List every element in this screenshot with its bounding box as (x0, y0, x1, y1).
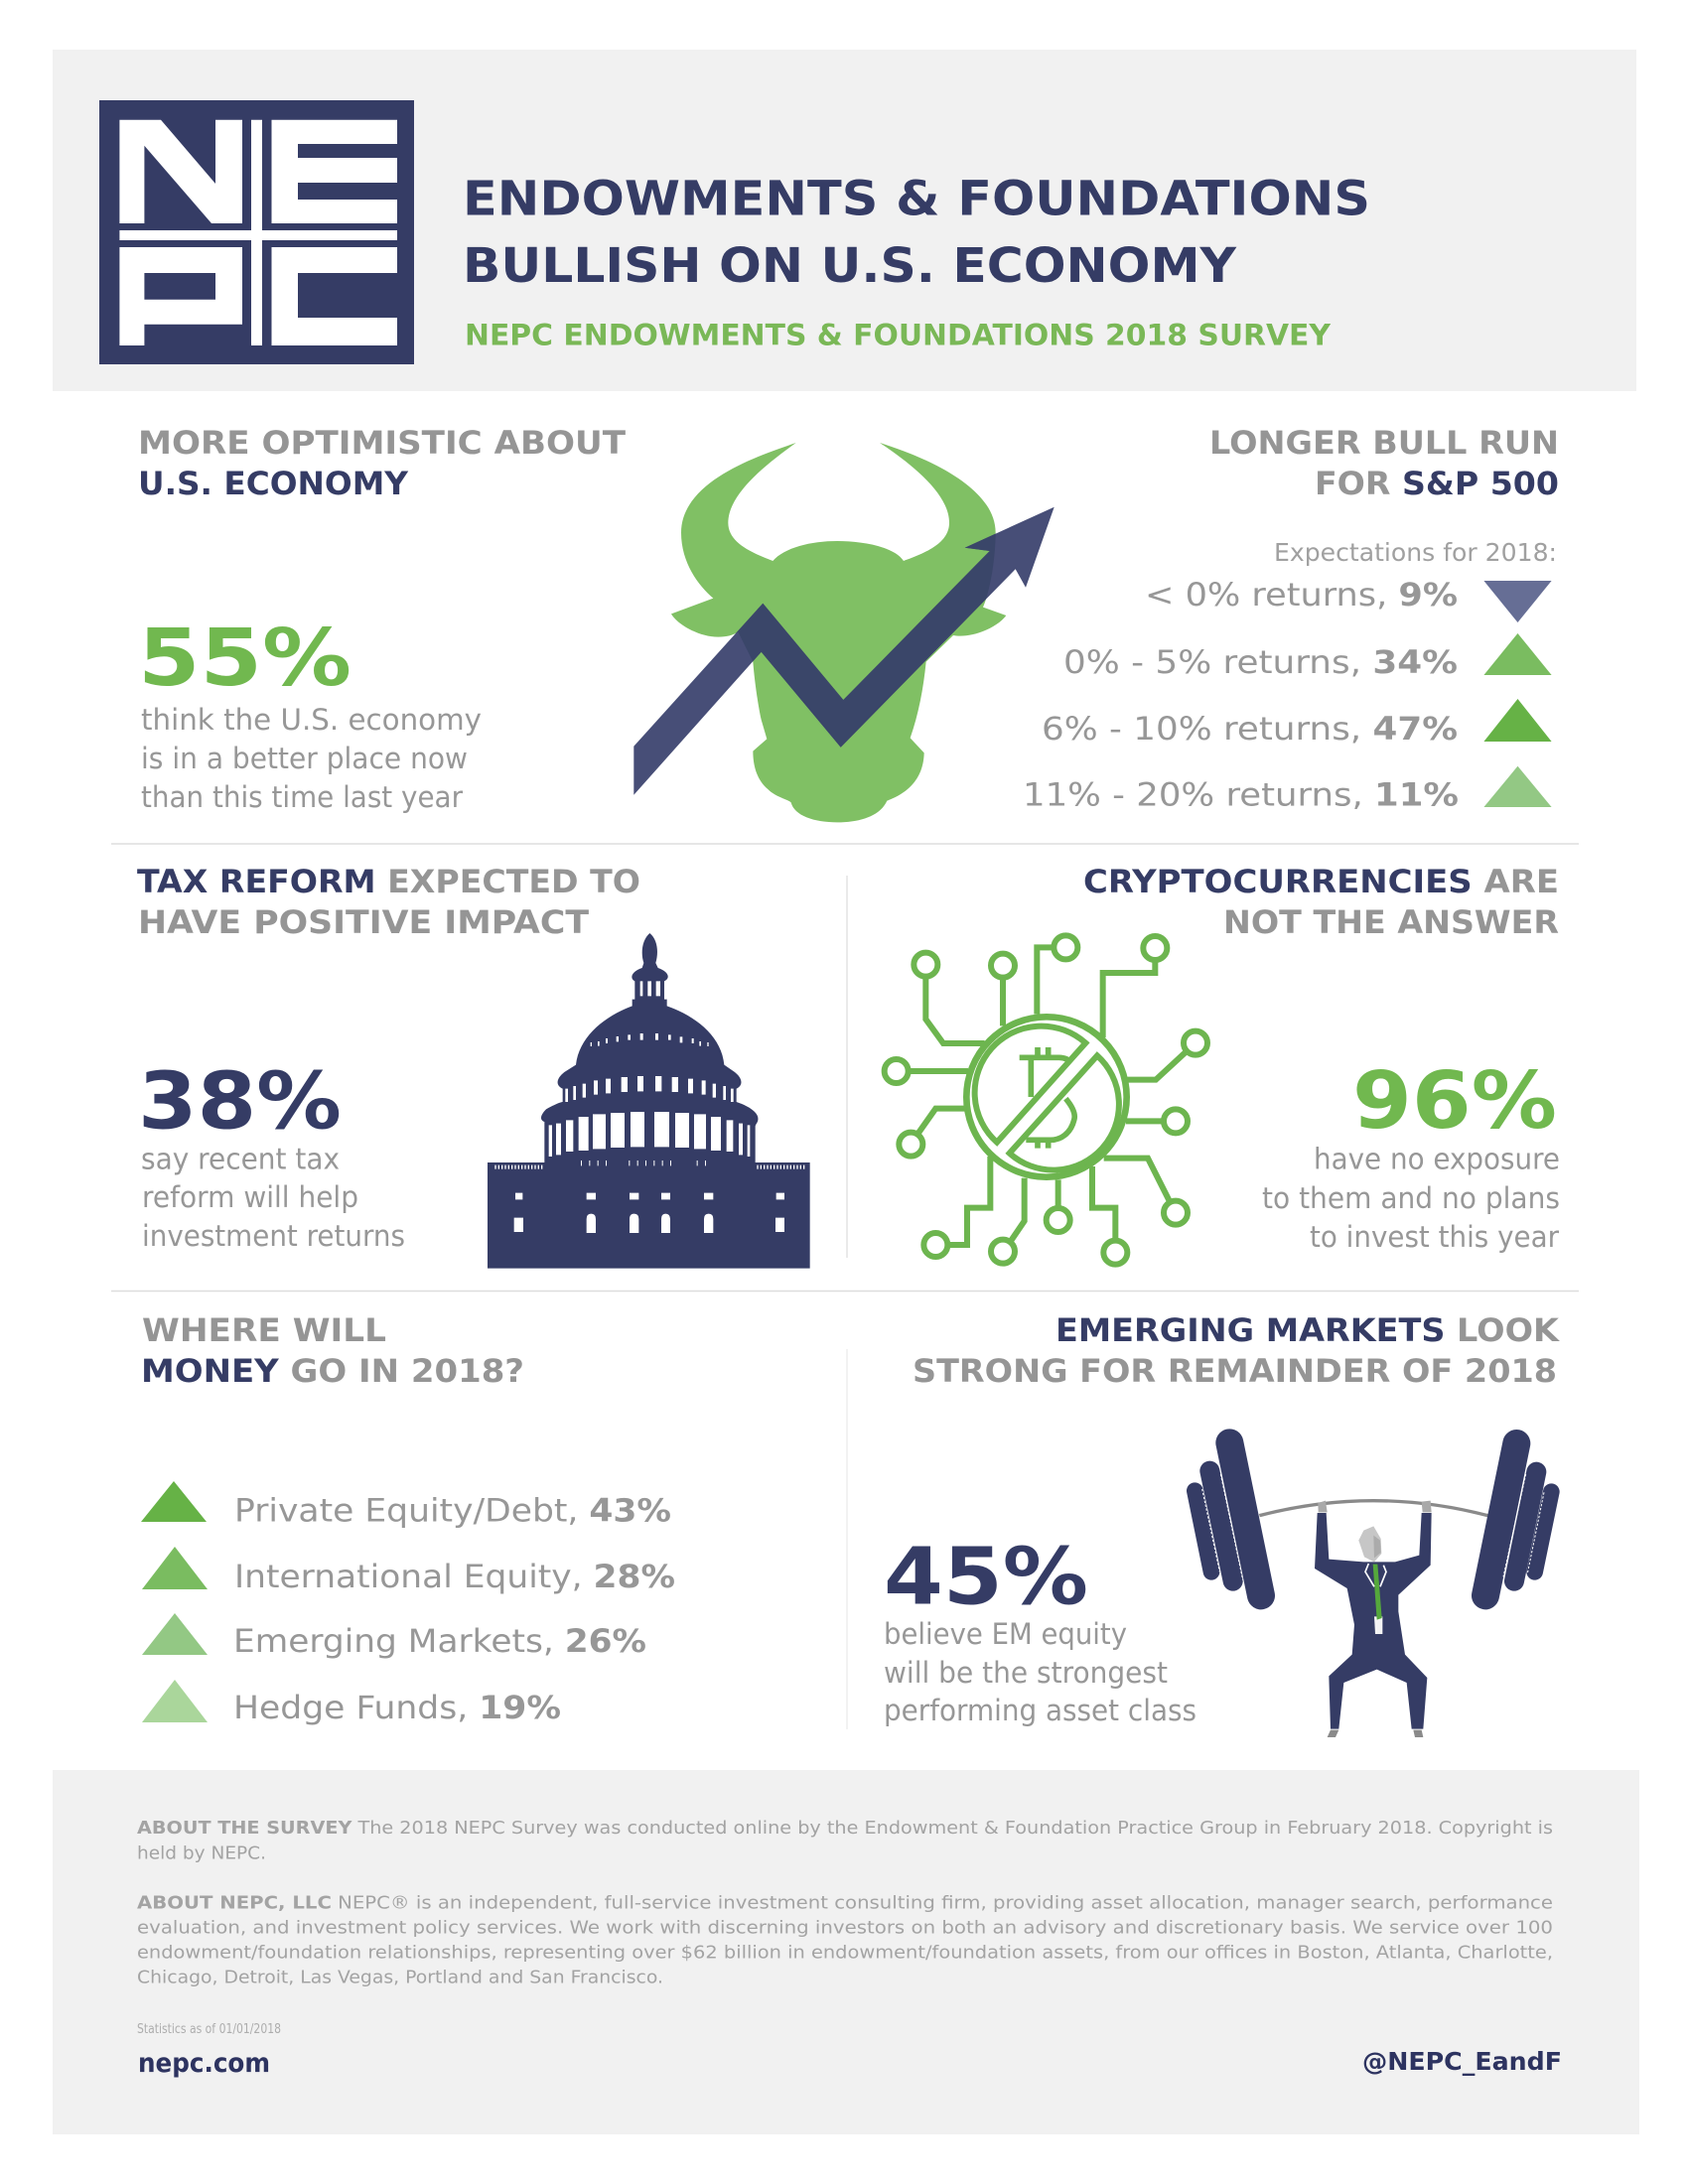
text block: say recent tax (141, 1142, 340, 1175)
title: BULLISH ON U.S. ECONOMY (463, 238, 1237, 294)
title: ENDOWMENTS & FOUNDATIONS (463, 171, 1370, 226)
row: emerging markets: Emerging Markets, 26% (233, 1622, 646, 1660)
website: nepc.com (138, 2048, 270, 2079)
text block: to invest this year (1310, 1220, 1559, 1254)
title (463, 171, 1370, 294)
heading: HAVE POSITIVE IMPACT (138, 903, 589, 941)
text block: will be the strongest (884, 1656, 1168, 1690)
row: international equity: International Equity, 28% (234, 1558, 675, 1595)
icon: bull with rising arrow (633, 443, 1055, 822)
row: 6-10%: 6% - 10% returns, 47% (1042, 710, 1458, 748)
text block: investment returns (142, 1219, 405, 1253)
text block (1262, 1142, 1560, 1254)
row: 0-5%: 0% - 5% returns, 34% (1063, 643, 1458, 681)
text block (884, 1617, 1196, 1727)
heading: WHERE WILL (142, 1311, 386, 1349)
row: 11-20%: 11% - 20% returns, 11% (1023, 776, 1459, 814)
statistic 38%: 38% (138, 1056, 342, 1148)
heading: MONEY GO IN 2018? (141, 1352, 524, 1390)
about NEPC: ABOUT NEPC, LLC NEPC® is an independent, full-service investment consulting firm, providing asset allocation, manager search, performance (137, 1892, 1553, 1914)
about NEPC: Chicago, Detroit, Las Vegas, Portland and San Francisco. (137, 1968, 663, 1987)
heading (138, 424, 626, 502)
heading (913, 1311, 1560, 1390)
heading: FOR S&P 500 (1315, 465, 1559, 502)
icon: capitol building (488, 933, 810, 1269)
row: hedge funds: Hedge Funds, 19% (233, 1689, 561, 1726)
text block: have no exposure (1314, 1142, 1560, 1175)
about NEPC: evaluation, and investment policy services. We work with discerning investors on both an advisory and discretionary basis. We service over 100 (137, 1918, 1553, 1938)
row: below 0% (1145, 576, 1552, 622)
text block: to them and no plans (1262, 1181, 1560, 1215)
header panel (53, 50, 1636, 391)
row: emerging markets (142, 1613, 646, 1660)
row: 11-20% (1023, 766, 1552, 814)
icon: NEPC logo (99, 100, 414, 364)
heading (141, 1311, 524, 1390)
heading: EMERGING MARKETS LOOK (1055, 1311, 1560, 1349)
text block: think the U.S. economy (141, 703, 482, 737)
row: private equity: Private Equity/Debt, 43% (234, 1491, 671, 1529)
heading: MORE OPTIMISTIC ABOUT (138, 424, 626, 462)
text block: is in a better place now (141, 742, 468, 775)
text block (141, 703, 482, 814)
panel: optimistic about economy (138, 424, 626, 814)
twitter handle: @NEPC_EandF (1362, 2047, 1562, 2076)
heading: STRONG FOR REMAINDER OF 2018 (913, 1352, 1557, 1390)
row: international equity (142, 1547, 675, 1595)
about the survey: held by NEPC. (137, 1843, 266, 1864)
dividers (111, 844, 1579, 1291)
footer panel (53, 1770, 1639, 2134)
windows and columns (514, 981, 784, 1233)
panel: longer bull run (1023, 424, 1559, 814)
legend heading: Expectations for 2018: (1274, 538, 1557, 567)
row: below 0%: < 0% returns, 9% (1145, 576, 1458, 614)
heading: LONGER BULL RUN (1209, 424, 1559, 462)
panel: cryptocurrencies (1083, 863, 1560, 1254)
statistic 96%: 96% (1352, 1055, 1557, 1147)
about NEPC (137, 1892, 1553, 1987)
heading: TAX REFORM EXPECTED TO (137, 863, 640, 900)
about NEPC: endowment/foundation relationships, representing over $62 billion in endowment/foundation assets, from our offices in Boston, Atlanta, Charlotte, (137, 1942, 1553, 1964)
text block: than this time last year (141, 780, 463, 814)
about the survey: ABOUT THE SURVEY The 2018 NEPC Survey was conducted online by the Endowment & Foundation Practice Group in February 2018. Copyright is (137, 1818, 1553, 1839)
text block: performing asset class (884, 1694, 1196, 1727)
heading (1209, 424, 1559, 502)
icon: businessman weightlifter (1195, 1442, 1551, 1737)
row: hedge funds (142, 1680, 561, 1726)
subtitle: NEPC ENDOWMENTS & FOUNDATIONS 2018 SURVEY (465, 318, 1332, 351)
panel: where money will go (141, 1311, 675, 1726)
text block (141, 1142, 405, 1253)
statistics note: Statistics as of 01/01/2018 (137, 2022, 281, 2037)
statistic 55%: 55% (138, 613, 352, 704)
text block: believe EM equity (884, 1617, 1127, 1651)
about the survey (137, 1818, 1553, 1864)
heading: NOT THE ANSWER (1223, 903, 1559, 941)
statistic 45%: 45% (884, 1531, 1088, 1622)
row: 0-5% (1063, 633, 1552, 681)
panel: emerging markets (884, 1311, 1560, 1727)
heading (137, 863, 640, 941)
text block: reform will help (142, 1180, 358, 1214)
row: 6-10% (1042, 699, 1552, 748)
row: private equity (141, 1481, 671, 1529)
heading: CRYPTOCURRENCIES ARE (1083, 863, 1559, 900)
icon: crypto circuit with crossed-out bitcoin (885, 935, 1207, 1265)
heading (1083, 863, 1559, 941)
heading: U.S. ECONOMY (138, 465, 409, 502)
panel: tax reform (137, 863, 640, 1253)
